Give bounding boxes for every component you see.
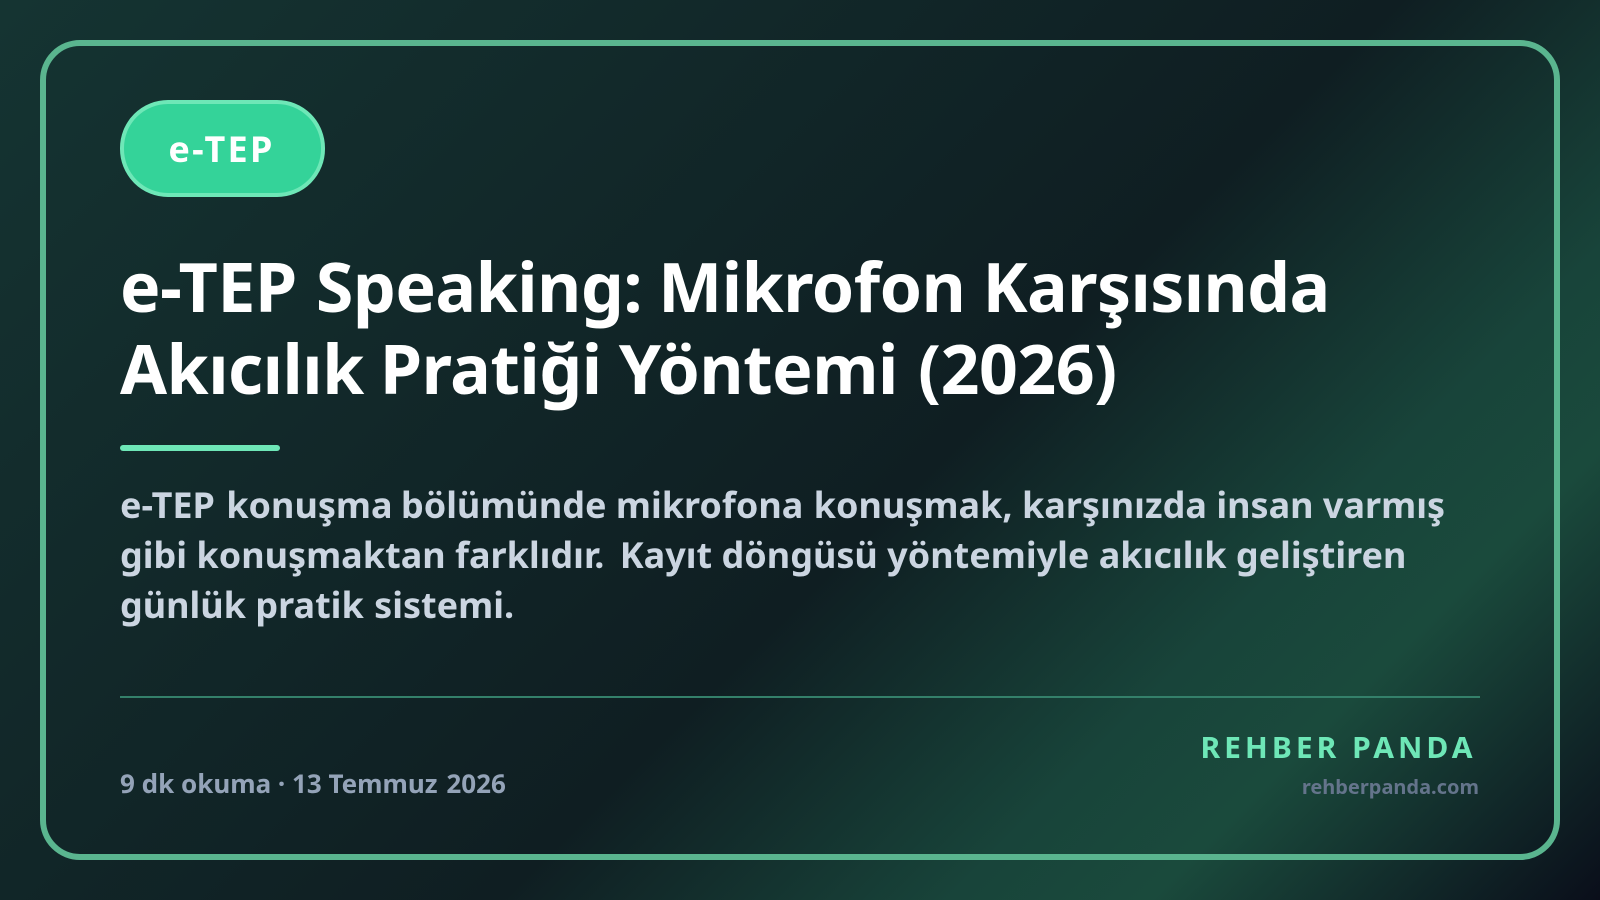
subtitle text: gibi konuşmaktan farklıdır. Kayıt döngüsü yöntemiyle akıcılık geliştiren [120, 530, 1406, 579]
title [120, 239, 1330, 414]
subtitle text: günlük pratik sistemi. [120, 580, 514, 629]
title: Akıcılık Pratiği Yöntemi (2026) [120, 321, 1117, 414]
badge: e-TEP [120, 100, 325, 197]
accent bar [120, 445, 280, 451]
brand url: rehberpanda.com [1302, 773, 1479, 800]
title: e-TEP Speaking: Mikrofon Karşısında [120, 239, 1330, 332]
brand block [1200, 726, 1479, 800]
subtitle text: e-TEP konuşma bölümünde mikrofona konuşmak, karşınızda insan varmış [120, 480, 1445, 529]
subtitle text [120, 480, 1445, 629]
footer divider [120, 696, 1480, 698]
badge: e-TEP: e-TEP [168, 124, 275, 173]
reading time and date: 9 dk okuma · 13 Temmuz 2026 [120, 765, 506, 801]
brand name: REHBER PANDA [1200, 726, 1476, 767]
